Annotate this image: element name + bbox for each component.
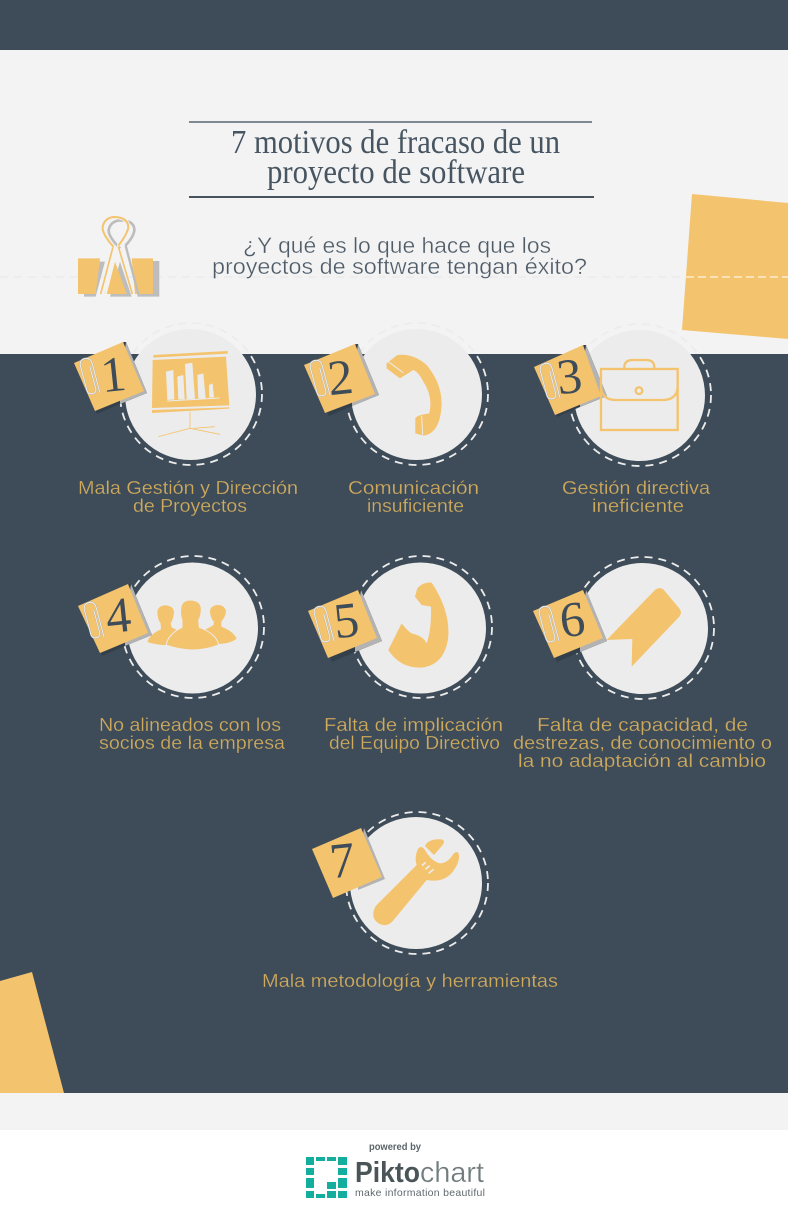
caption 6: destrezas, de conocimiento o bbox=[513, 733, 772, 753]
item 5: management involvement bbox=[308, 556, 503, 753]
item 6: lack of skills bbox=[513, 557, 772, 771]
title bbox=[189, 122, 594, 197]
icon: phone handset bbox=[387, 355, 442, 436]
caption 1 bbox=[78, 478, 298, 516]
caption 4: socios de la empresa bbox=[99, 733, 286, 753]
note: number 2 bbox=[304, 344, 379, 416]
icon: flexed arm bbox=[388, 583, 448, 668]
tagline: make information beautiful bbox=[355, 1187, 485, 1199]
item 3: ineffective management bbox=[534, 324, 711, 516]
note: number 4: 4 bbox=[103, 586, 134, 644]
caption 1: de Proyectos bbox=[133, 496, 247, 516]
caption 4 bbox=[99, 715, 286, 753]
note: number 7: 7 bbox=[327, 831, 358, 889]
wordmark: Pikto bbox=[355, 1157, 420, 1189]
icon: tag bbox=[607, 588, 681, 667]
note: number 6 bbox=[533, 590, 607, 662]
note: number 7 bbox=[312, 828, 385, 898]
footer: Piktochart logo: chart bbox=[420, 1157, 484, 1189]
item 4: not aligned with partners bbox=[78, 556, 286, 753]
title: 7 motivos de fracaso de un bbox=[231, 124, 560, 161]
note: number 6: 6 bbox=[557, 590, 588, 648]
icon: group of people bbox=[147, 600, 237, 650]
note: number 5 bbox=[308, 590, 382, 662]
powered by: powered by bbox=[369, 1142, 421, 1153]
logo mark bbox=[306, 1157, 347, 1198]
item 7: poor methodology and tools bbox=[262, 812, 558, 991]
item 1: project management bbox=[74, 323, 298, 516]
icon: binder clip bbox=[78, 217, 159, 297]
caption 4: No alineados con los bbox=[99, 715, 281, 735]
caption 3 bbox=[562, 478, 711, 516]
note: number 1 bbox=[74, 342, 147, 414]
icon: wrench bbox=[373, 839, 459, 925]
caption 3: ineficiente bbox=[592, 496, 684, 516]
caption 5: Falta de implicación bbox=[324, 715, 503, 735]
decorative yellow sheet bottom left bbox=[0, 972, 64, 1093]
subtitle: ¿Y qué es lo que hace que los bbox=[243, 233, 551, 258]
footer strip bbox=[0, 1093, 788, 1130]
caption 2: insuficiente bbox=[367, 496, 464, 516]
note: number 5: 5 bbox=[331, 591, 362, 649]
subtitle: proyectos de software tengan éxito? bbox=[212, 254, 587, 279]
top band bbox=[0, 0, 788, 50]
note: number 3: 3 bbox=[554, 347, 585, 405]
title: proyecto de software bbox=[267, 154, 525, 191]
caption 5 bbox=[324, 715, 503, 753]
header panel bbox=[0, 50, 788, 354]
caption 7: Mala metodología y herramientas bbox=[262, 971, 558, 991]
caption 3: Gestión directiva bbox=[562, 478, 711, 498]
note: number 2: 2 bbox=[325, 348, 356, 406]
dark main panel bbox=[0, 354, 788, 1093]
caption 6 bbox=[513, 715, 772, 771]
caption 1: Mala Gestión y Dirección bbox=[78, 478, 298, 498]
icon: presentation board bbox=[152, 351, 229, 437]
item 2: communication bbox=[304, 323, 488, 516]
footer: Piktochart logo bbox=[306, 1142, 485, 1199]
note: number 3 bbox=[534, 345, 607, 417]
caption 5: del Equipo Directivo bbox=[329, 733, 500, 753]
decorative yellow sheet top right bbox=[682, 194, 788, 339]
note: number 4 bbox=[78, 584, 152, 656]
icon: briefcase bbox=[601, 360, 678, 430]
caption 6: Falta de capacidad, de bbox=[537, 715, 748, 735]
caption 6: la no adaptación al cambio bbox=[518, 751, 766, 771]
dashed line across header bbox=[0, 276, 788, 278]
caption 2 bbox=[348, 478, 479, 516]
note: number 1: 1 bbox=[98, 345, 129, 403]
caption 2: Comunicación bbox=[348, 478, 479, 498]
subtitle bbox=[212, 233, 587, 279]
